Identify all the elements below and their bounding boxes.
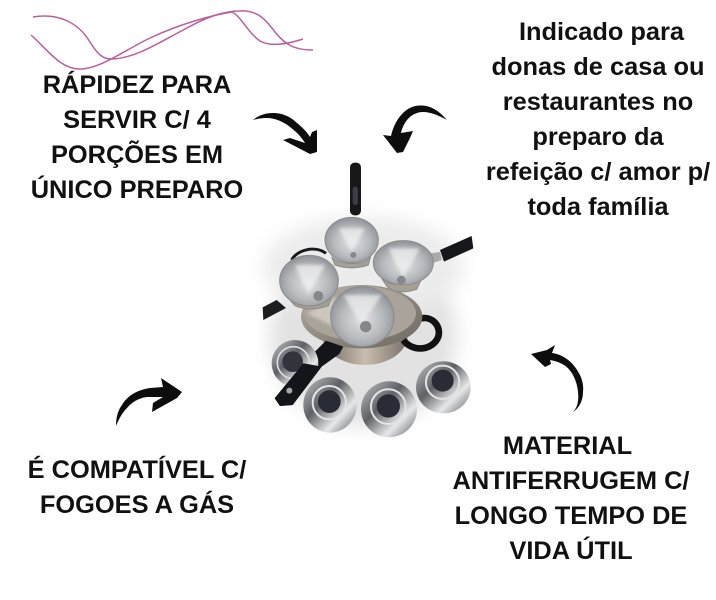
text block: top right: toda família	[527, 193, 669, 221]
text block: top right: preparo da	[532, 123, 664, 151]
text block: top left: RÁPIDEZ PARA	[43, 71, 231, 99]
text block: bottom right: MATERIAL	[503, 432, 632, 460]
text block: bottom left: É COMPATÍVEL C/	[28, 456, 246, 484]
decoration: pink waves	[31, 11, 313, 69]
text block: top left	[31, 70, 243, 204]
arrow: bottom left	[116, 378, 182, 426]
text block: top right: Indicado para	[519, 18, 684, 46]
bowls	[280, 217, 433, 347]
text block: top right: refeição c/ amor p/	[486, 158, 710, 186]
text block: top right	[486, 18, 710, 221]
text block: bottom right	[452, 432, 690, 565]
arrow: top right	[383, 105, 447, 153]
text block: top left: ÚNICO PREPARO	[31, 176, 243, 204]
text block: bottom right: VIDA ÚTIL	[509, 537, 633, 565]
arrow: bottom right	[531, 345, 583, 412]
main pot	[322, 305, 408, 365]
text block: top left: PORÇÕES EM	[51, 141, 223, 169]
text block: bottom left: FOGOES A GÁS	[40, 491, 234, 519]
text block: bottom right: LONGO TEMPO DE	[455, 502, 687, 530]
front handle	[275, 341, 343, 406]
arrow: top left	[253, 113, 317, 154]
lids	[272, 340, 471, 437]
product photo: pot set with four bowls and lids	[263, 163, 473, 437]
text block: top left: SERVIR C/ 4	[63, 106, 211, 134]
text block: bottom left	[28, 456, 246, 519]
pan back handles	[350, 163, 361, 215]
text block: top right: restaurantes no	[503, 88, 693, 116]
soft shadow background	[270, 247, 457, 427]
text block: top right: donas de casa ou	[491, 53, 705, 81]
text block: bottom right: ANTIFERRUGEM C/	[452, 467, 689, 495]
